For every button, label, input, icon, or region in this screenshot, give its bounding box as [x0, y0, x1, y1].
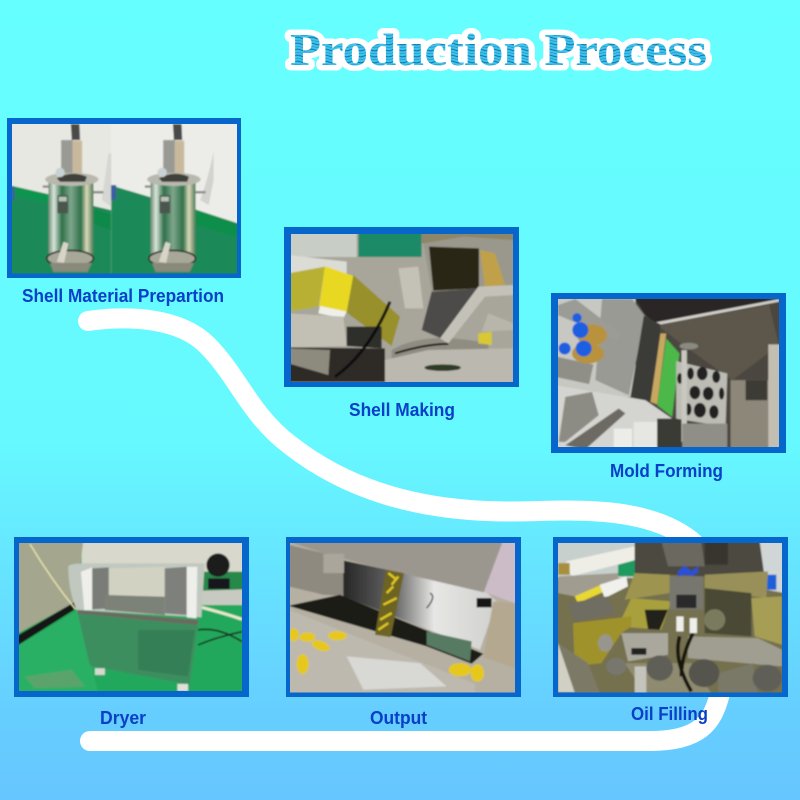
photo: capsule output [290, 543, 515, 692]
title: Production Process [290, 25, 707, 75]
label: mold forming: Mold Forming [610, 461, 723, 481]
photo: oil filling machine [558, 543, 782, 692]
label: shell making: Shell Making [349, 400, 455, 420]
panel: dryer [14, 537, 249, 728]
photo: mold roller [558, 299, 779, 447]
panel: oil filling [553, 537, 788, 724]
panel: shell making [284, 227, 519, 420]
label: dryer: Dryer [100, 708, 146, 728]
label: oil filling: Oil Filling [631, 704, 708, 724]
panel: output [286, 537, 521, 728]
panel: mold forming [551, 293, 786, 481]
label: output: Output [370, 708, 427, 728]
photo: stainless steel tanks [12, 124, 237, 274]
label: shell material preparation: Shell Material Prepartion [22, 286, 224, 306]
photo: shell making machine [291, 234, 513, 382]
process flow line [88, 318, 727, 741]
photo: dryer machine [19, 543, 242, 691]
panel: shell material preparation [7, 118, 241, 306]
